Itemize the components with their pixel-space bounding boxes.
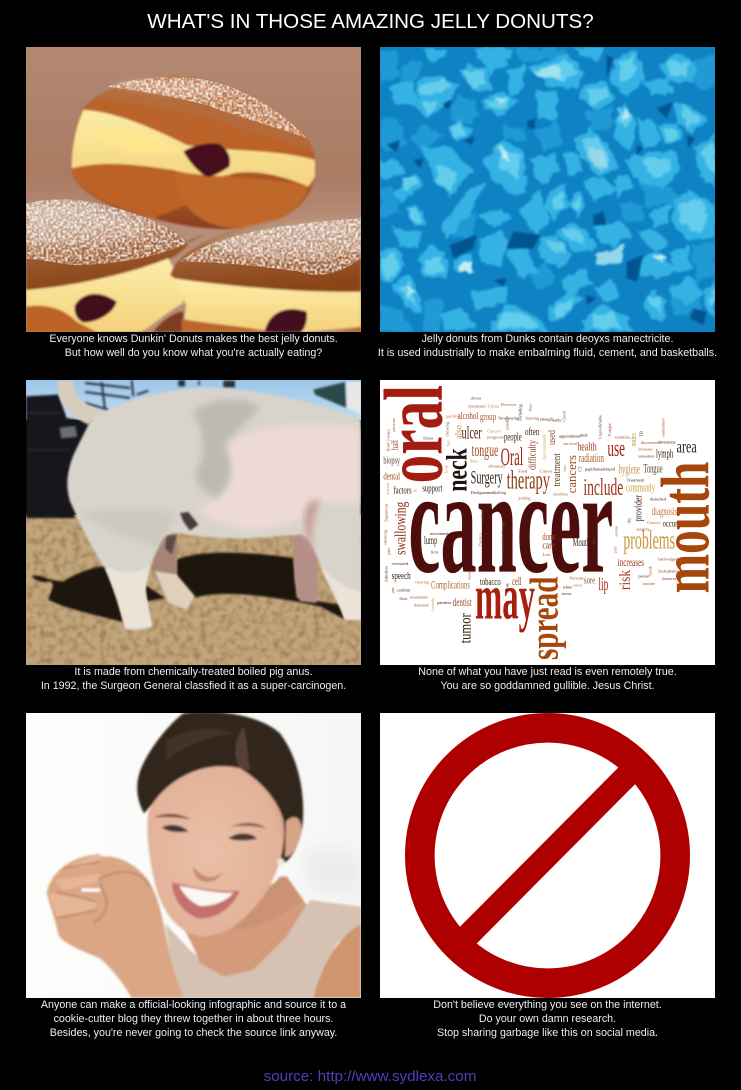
supporting words (383, 411, 697, 643)
tiny words: Tonight (607, 422, 612, 437)
pig shadow (32, 553, 345, 621)
tiny words: area (591, 538, 596, 545)
supporting words: group (480, 412, 496, 423)
panel: jelly donuts photo (26, 47, 361, 332)
tiny words: sensation (638, 453, 655, 458)
tiny words: CT (578, 466, 583, 472)
tiny words: Loosely (430, 597, 435, 612)
tiny words: Calling (493, 490, 507, 495)
tiny words: dentures (662, 576, 677, 581)
caption: panel 5: Besides, you're never going to check the source link anyway. (50, 1027, 337, 1039)
tiny words: delayed (602, 467, 616, 472)
tiny words: determine (658, 439, 676, 444)
tiny words: chewing (415, 579, 430, 584)
tiny words: dark (580, 433, 589, 438)
supporting words: problems (623, 525, 675, 554)
caption: panel 4: You are so goddamned gullible. Jesus Christ. (440, 680, 655, 692)
powdered sugar (26, 77, 361, 275)
tiny words: Approximately (542, 433, 547, 460)
supporting words: cancers (565, 455, 579, 493)
panel: pig photo (26, 380, 361, 665)
supporting words: also (454, 425, 464, 439)
tiny words: Speak (648, 565, 653, 577)
tiny words: disturbed (650, 497, 667, 502)
tiny words: examine (615, 435, 630, 440)
tiny words: Pain (470, 459, 479, 464)
supporting words: swallowing (392, 501, 409, 555)
supporting words: dental (383, 471, 400, 482)
left donut (26, 201, 188, 332)
supporting words: risk (617, 570, 634, 590)
tiny words: movement (430, 531, 449, 536)
tiny words: doctor (471, 395, 482, 400)
tiny words: Jb (413, 489, 418, 493)
supporting words: nodes (628, 433, 638, 447)
jam (183, 143, 230, 177)
pig body (67, 387, 361, 630)
supporting words: treatment (552, 453, 563, 487)
tiny words: confirm (397, 588, 411, 593)
supporting words: Mouth (573, 537, 590, 549)
neck and chest (177, 877, 307, 977)
caption: panel 5: cookie-cutter blog they threw together in about three hours. (54, 1013, 333, 1025)
supporting words: Tongue (643, 462, 663, 476)
tiny words: infection (383, 565, 388, 582)
tiny words: smoking (383, 529, 388, 545)
tiny words: increase (638, 447, 653, 452)
tiny words: involves (553, 491, 568, 496)
tiny words: Link (443, 464, 448, 473)
word: spread: spread (521, 577, 566, 660)
supporting words: cell (512, 574, 522, 588)
supporting words: provider (634, 494, 645, 522)
supporting words: therapy (507, 464, 550, 494)
tiny words: palate (638, 573, 649, 578)
supporting words: difficulty (527, 440, 538, 470)
tiny words: Chronic (647, 520, 661, 525)
tiny words: white (563, 584, 572, 589)
caption: panel 2: Jelly donuts from Dunks contain deoyxs manectricite. (422, 333, 673, 345)
dark crevices (387, 55, 707, 325)
supporting words: use (607, 436, 625, 462)
dark spots (180, 512, 198, 531)
tiny words: pain (386, 547, 391, 555)
word: may: may (475, 561, 535, 633)
tiny words: burning (526, 415, 540, 420)
eyes (162, 825, 257, 840)
supporting words: half (390, 440, 401, 450)
tiny words: Cancer (540, 469, 553, 474)
tiny words: pale (613, 546, 618, 553)
caption: panel 6: Don't believe everything you see on the internet. (433, 999, 662, 1011)
supporting words: Complications (431, 577, 470, 591)
tiny words: treatments (410, 594, 428, 599)
icon: no symbol (420, 728, 675, 983)
caption: panel 6: Stop sharing garbage like this on social media. (437, 1027, 658, 1039)
word: neck: neck (442, 448, 474, 492)
tiny words: survival (563, 441, 578, 446)
panel: prohibition sign (380, 713, 715, 998)
ear and earring (285, 817, 301, 857)
tiny words: early (553, 418, 562, 423)
tiny words: enough (540, 417, 554, 422)
tiny words: jaw (390, 586, 395, 594)
mouth (172, 883, 240, 918)
tiny words: surgery (637, 527, 650, 532)
caption: panel 1: Everyone knows Dunkin' Donuts makes the best jelly donuts. (49, 333, 338, 345)
caption: panel 3: In 1992, the Surgeon General classfied it as a super-carcinogen. (41, 680, 346, 692)
tiny words: Check (562, 410, 567, 422)
tiny words: throat (504, 582, 509, 593)
right donut (170, 216, 361, 332)
hand (47, 855, 183, 998)
fence and dark background (26, 380, 361, 518)
tiny words: Lost (543, 552, 551, 557)
tiny words: weeken (479, 509, 484, 523)
caption: panel 5: Anyone can make a official-looking infographic and source it to a (41, 999, 346, 1011)
tiny words: Unpredictable (598, 415, 603, 439)
tiny words: Treatment (627, 478, 645, 483)
supporting words: diagnosis (652, 506, 677, 518)
tiny words: leukoplakia (658, 568, 679, 573)
supporting words: done (542, 532, 555, 543)
shoulder (313, 924, 361, 998)
tiny words: particularly (500, 529, 505, 550)
supporting words: dentist (453, 597, 472, 609)
tiny words: date (562, 464, 567, 472)
supporting words: lump (424, 535, 438, 547)
supporting words: used (547, 429, 558, 445)
supporting words: often (525, 427, 539, 438)
tiny words: hard-edged (658, 557, 679, 562)
pig tail (58, 381, 103, 425)
supporting words: care (542, 540, 555, 551)
tiny words: view (467, 571, 472, 580)
tiny words: metastasis (468, 403, 486, 408)
supporting words: tongue (472, 440, 498, 460)
caption: panel 6: Do your own damn research. (479, 1013, 616, 1025)
supporting words: factors (393, 485, 412, 496)
hair back (137, 712, 303, 863)
tiny words: stress (562, 591, 572, 596)
panel: smiling woman photo (26, 713, 361, 998)
tiny words: routine (643, 581, 655, 586)
supporting words: Oral (501, 443, 523, 471)
tiny words: deep (528, 403, 533, 412)
panel: oral cancer word cloud (368, 380, 723, 665)
tiny words: system (385, 482, 390, 495)
tiny words: discovered (641, 440, 660, 445)
supporting words: biopsy (383, 455, 400, 466)
tiny words: Squamous (383, 503, 388, 522)
supporting words: occur (663, 520, 678, 530)
tiny words: throat (423, 435, 434, 440)
title: WHAT'S IN THOSE AMAZING JELLY DONUTS? (147, 10, 594, 33)
tiny words: TB (638, 431, 643, 437)
tiny words: oversized (392, 561, 409, 566)
tiny words: Practice (478, 533, 483, 547)
tiny words: quickly (446, 413, 459, 418)
caption: panel 3: It is made from chemically-treated boiled pig anus. (74, 666, 313, 678)
top donut (71, 77, 316, 229)
supporting words: include (583, 474, 623, 501)
tiny words: painless (437, 600, 452, 605)
supporting words: tumor (458, 613, 475, 643)
tiny words: firm (431, 549, 439, 554)
tiny words: appointment (559, 433, 581, 438)
source line: source: http://www.sydlexa.com (264, 1068, 476, 1085)
word: mouth: mouth (647, 462, 723, 593)
tiny words: chewing (444, 421, 449, 437)
tiny words: See (445, 440, 450, 447)
tiny words: detected (414, 603, 429, 608)
caption: panel 2: It is used industrially to make embalming fluid, cement, and basketballs. (378, 347, 717, 359)
supporting words: people (504, 432, 522, 444)
caption: panel 4: None of what you have just read is even remotely true. (418, 666, 677, 678)
tiny words: users (573, 583, 583, 588)
supporting words: commonly (626, 481, 655, 495)
supporting words: support (422, 484, 442, 495)
tiny words: joining (517, 495, 531, 500)
tiny words: including (518, 403, 523, 421)
supporting words: Surgery (471, 467, 503, 488)
crystals (380, 48, 715, 332)
supporting words: sore (584, 575, 595, 586)
tiny words: prognosis (487, 435, 504, 440)
pig legs far (152, 535, 318, 610)
supporting words: health (577, 440, 597, 454)
tiny words: papilloma (585, 467, 602, 472)
tiny words: Swallowing (498, 415, 520, 420)
sand ground (26, 515, 361, 665)
eyebrows (154, 814, 266, 828)
tiny words: floor (399, 596, 408, 601)
dress (165, 900, 361, 998)
crystal highlights (380, 55, 715, 328)
tiny words: However (501, 402, 517, 407)
supporting words: lymph (656, 446, 674, 460)
tiny words: get (501, 521, 506, 527)
supporting words: area (677, 437, 697, 457)
supporting words: lip (598, 574, 608, 594)
supporting words: speech (392, 571, 411, 582)
caption: panel 1: But how well do you know what you're actually eating? (65, 347, 322, 359)
tiny words (383, 395, 679, 612)
tiny words: Road 3 ways (385, 429, 390, 452)
supporting words: increases (618, 555, 644, 569)
nose shadow (193, 867, 223, 882)
supporting words: ulcer (462, 422, 482, 442)
supporting words: hygiene (619, 461, 640, 476)
tiny words: persons (391, 418, 396, 432)
tiny words: sometimes (660, 418, 665, 437)
tiny words: advanced (488, 463, 506, 468)
tiny words: dry (627, 517, 632, 523)
face (147, 766, 284, 937)
tiny words: serum (613, 525, 618, 537)
panel: blue crystals photo (380, 47, 715, 332)
tiny words: Food (518, 469, 528, 474)
supporting words: alcohol (458, 411, 478, 422)
tiny words: Persons (570, 575, 584, 580)
tiny words: Taking (487, 403, 500, 408)
tiny words: Disfigurement (471, 490, 496, 495)
supporting words: radiation (579, 451, 604, 465)
tiny words: Cancers (487, 429, 502, 434)
supporting words: tobacco (480, 577, 501, 588)
tiny words: usually (504, 417, 509, 430)
